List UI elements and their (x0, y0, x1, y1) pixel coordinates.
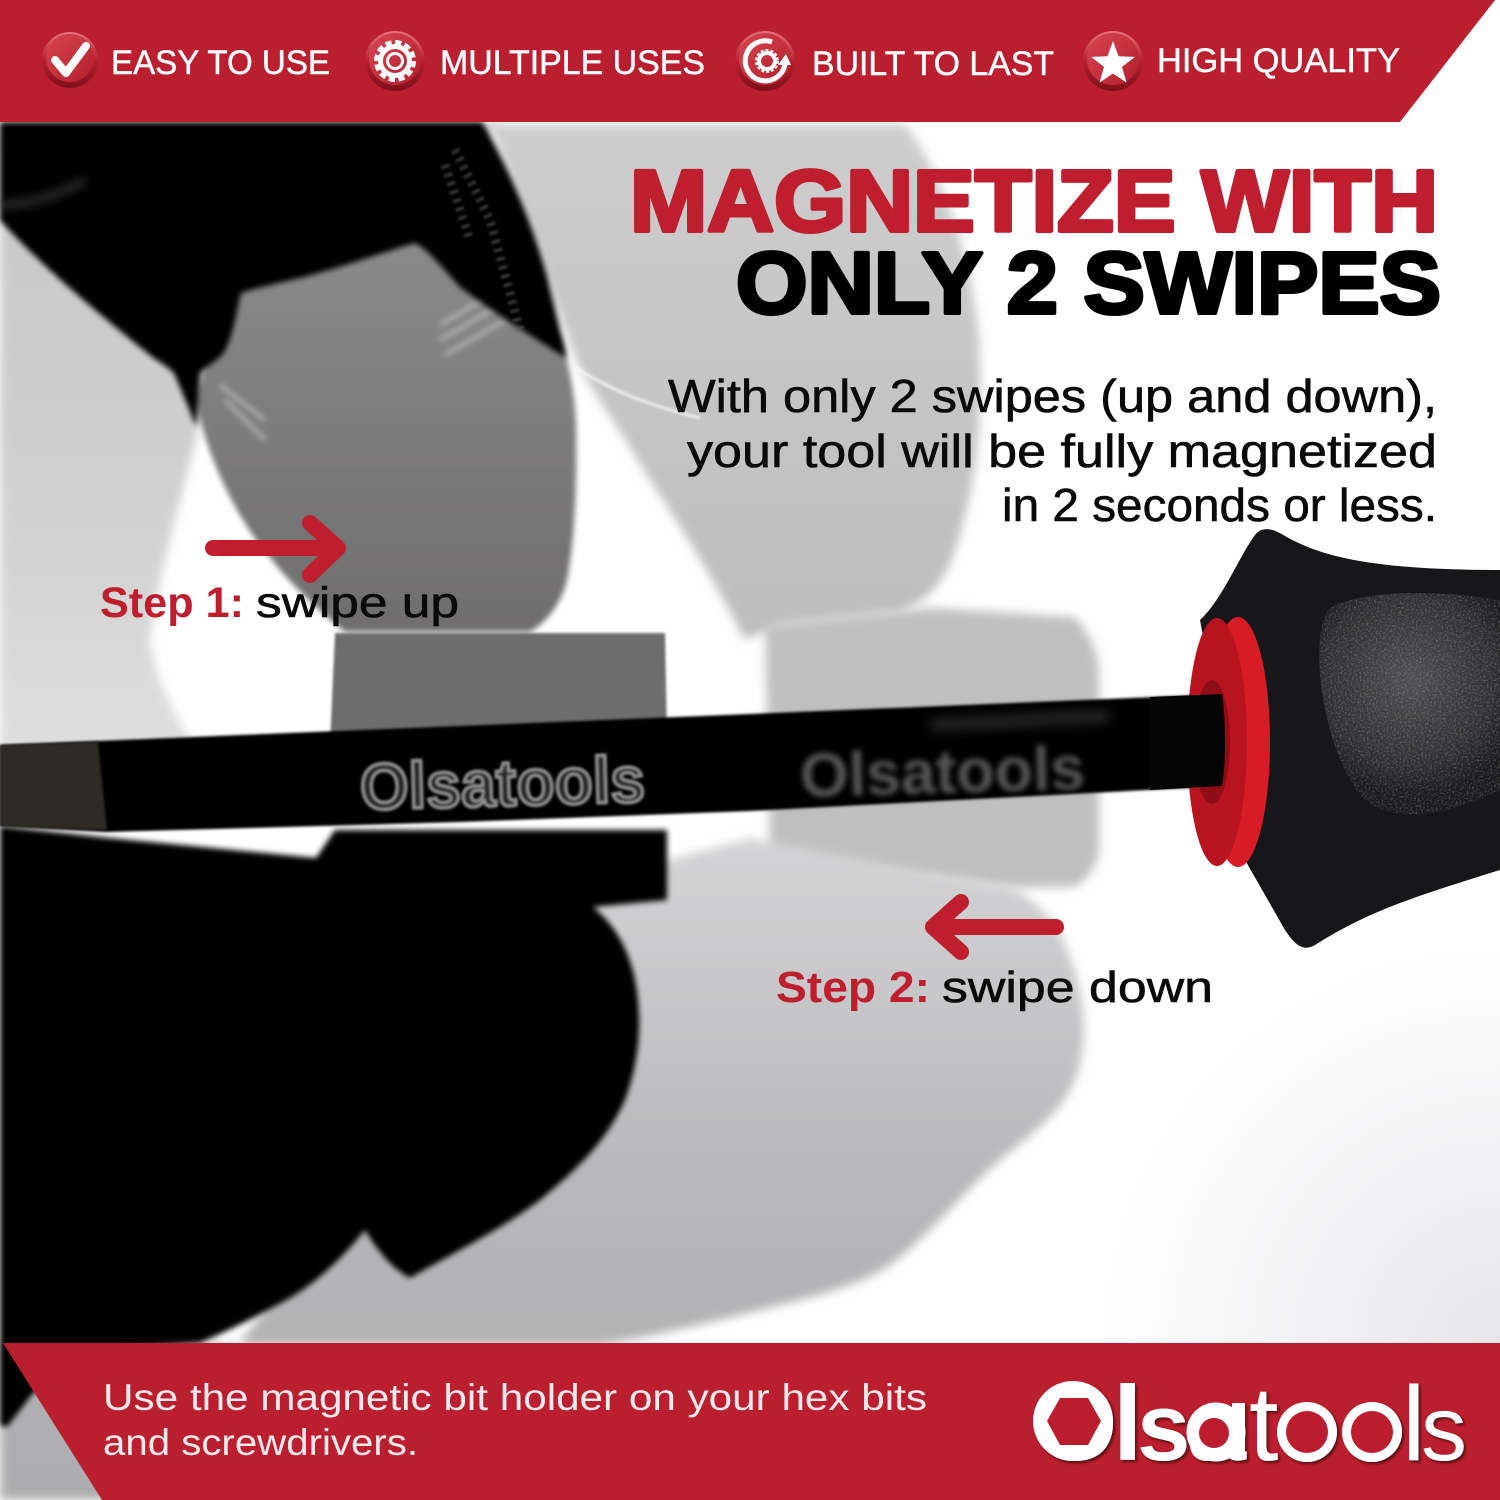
ghost magnet dark (330, 633, 667, 745)
logo: tool (1249, 1365, 1426, 1483)
ghost finger dark (196, 230, 576, 632)
feature: high quality: HIGH QUALITY (1157, 42, 1400, 80)
icon: star (1083, 31, 1143, 91)
usage note (103, 1377, 927, 1463)
ghost magnet light (765, 608, 1099, 888)
logo (1033, 1365, 1467, 1483)
usage note: Use the magnetic bit holder on your hex bits (103, 1377, 927, 1418)
black hand top (0, 122, 566, 427)
engraved logo on shaft: Olsatools (359, 742, 646, 824)
step 1 label: swipe up (256, 579, 459, 627)
heading: ONLY 2 SWIPES (736, 235, 1441, 332)
light streaks (576, 368, 700, 418)
logo: Ol (1035, 1365, 1142, 1483)
step 1 label (100, 579, 459, 627)
bottom banner (3, 1343, 1500, 1500)
usage note: and screwdrivers. (103, 1422, 418, 1463)
icon: built to last (735, 31, 795, 91)
icon: check (42, 32, 98, 88)
ghost hand top (490, 124, 980, 640)
description text: your tool will be fully magnetized (687, 425, 1437, 477)
description text: in 2 seconds or less. (1002, 479, 1437, 531)
feature: easy to use: EASY TO USE (111, 44, 330, 82)
heading: MAGNETIZE WITH (630, 153, 1438, 250)
feature: built to last: BUILT TO LAST (812, 45, 1054, 83)
screwdriver handle (1150, 529, 1500, 948)
arrow: swipe down (933, 902, 1056, 952)
heading (630, 153, 1441, 332)
ghost background left (0, 124, 500, 750)
step 2 label: swipe down (942, 963, 1213, 1012)
arrow: swipe up (213, 523, 338, 575)
black hand bottom and magnet (0, 826, 667, 1427)
red ring (1206, 617, 1270, 867)
logo: a (1187, 1365, 1247, 1483)
logo: s (1137, 1374, 1190, 1481)
feature: multiple uses: MULTIPLE USES (440, 44, 705, 82)
step 2 label: Step 2: (776, 963, 930, 1012)
shaft (0, 694, 1225, 832)
step 1 label: Step 1: (100, 579, 244, 627)
shaft end in ring (1150, 694, 1225, 790)
top banner (0, 0, 1495, 122)
icon: gear (365, 31, 425, 91)
engraved ghost logo on shaft: Olsatools (799, 734, 1086, 811)
logo: s (1421, 1378, 1467, 1480)
description text (668, 370, 1437, 531)
ghost hand bottom (0, 838, 1084, 1500)
step 2 label (776, 963, 1213, 1012)
description text: With only 2 swipes (up and down), (668, 370, 1437, 422)
